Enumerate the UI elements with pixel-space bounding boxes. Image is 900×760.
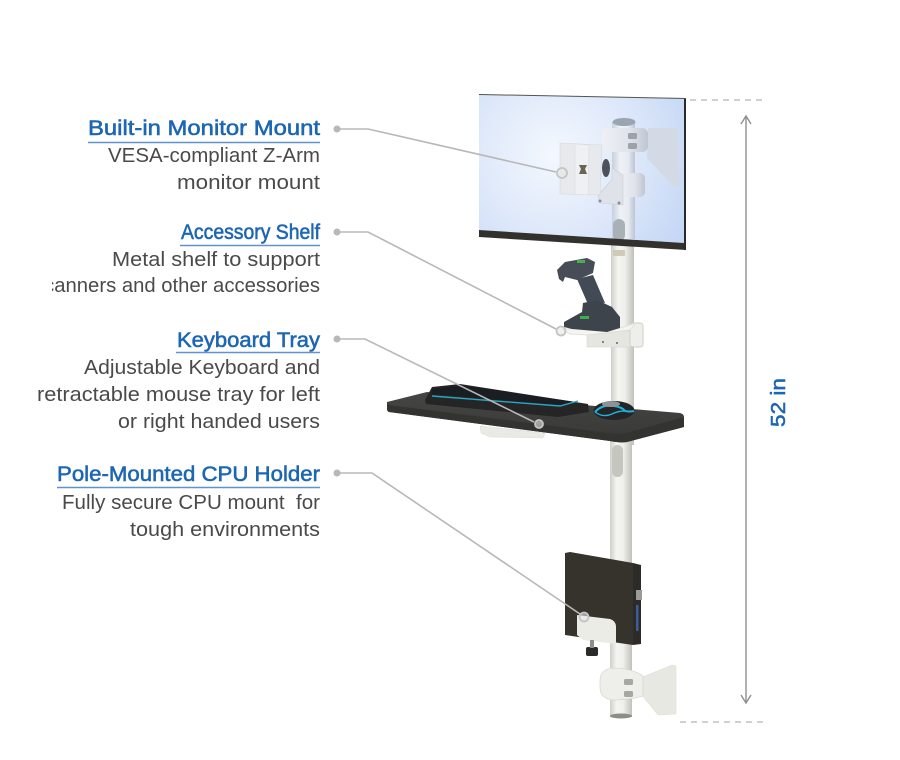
- pole collar: [600, 668, 643, 700]
- wall mount base: [600, 665, 676, 715]
- keyboard: [425, 384, 589, 417]
- description: retractable mouse tray for left: [37, 384, 320, 406]
- bottom extension line: [680, 721, 765, 723]
- description: [52, 251, 320, 292]
- knob: [586, 640, 598, 656]
- callout: built-in monitor mount: [88, 117, 567, 194]
- heading: Accessory Shelf: [181, 221, 320, 244]
- monitor bezel: [479, 230, 686, 250]
- heading: Built-in Monitor Mount: [88, 117, 320, 140]
- heading: Keyboard Tray: [177, 329, 321, 352]
- tray top: [387, 392, 684, 442]
- monitor screen: [479, 94, 684, 243]
- height label: 52 in: [768, 378, 790, 427]
- description: Metal shelf to support: [112, 249, 320, 271]
- scanner cradle: [564, 300, 620, 332]
- description: Fully secure CPU mount for: [62, 492, 320, 514]
- wall plate: [640, 665, 676, 715]
- description: [37, 357, 320, 433]
- callout: keyboard tray: [37, 329, 543, 433]
- leader line: [334, 228, 566, 336]
- description: or right handed users: [118, 411, 320, 433]
- pole seen through the monitor: [612, 118, 636, 241]
- description: [62, 492, 320, 541]
- Z-arm: [598, 159, 623, 205]
- mouse: [594, 401, 634, 420]
- tray bracket: [480, 426, 545, 438]
- VESA plate: [560, 143, 602, 195]
- leader line: [334, 470, 588, 622]
- description: monitor mount: [177, 172, 320, 194]
- wall bracket: [647, 128, 680, 186]
- double arrow: [741, 116, 751, 703]
- keyboard tray: [387, 384, 684, 442]
- lower clamp: [620, 173, 645, 197]
- monitor: [479, 94, 686, 250]
- scanner head: [557, 258, 595, 282]
- CPU side: [633, 563, 641, 645]
- description: [108, 145, 320, 194]
- callout: accessory shelf: [34, 221, 566, 336]
- CPU front: [565, 552, 633, 645]
- leader line: [334, 336, 543, 428]
- description: tough environments: [130, 519, 320, 541]
- description: VESA-compliant Z-Arm: [108, 145, 320, 167]
- leader line: [334, 126, 567, 178]
- description: scanners and other accessories: [34, 275, 320, 297]
- upper clamp: [602, 128, 648, 152]
- scanner handle: [577, 275, 605, 303]
- top extension line: [690, 99, 765, 101]
- shelf bracket: [562, 323, 643, 347]
- heading: Pole-Mounted CPU Holder: [57, 463, 320, 486]
- CPU clamp plate: [577, 615, 616, 644]
- description: Adjustable Keyboard and: [84, 357, 320, 379]
- CPU holder: [565, 552, 642, 656]
- accessory shelf with scanner: [557, 258, 643, 347]
- height dimension: [680, 100, 790, 722]
- callout: pole-mounted CPU holder: [57, 463, 588, 622]
- wall pole: [610, 235, 634, 718]
